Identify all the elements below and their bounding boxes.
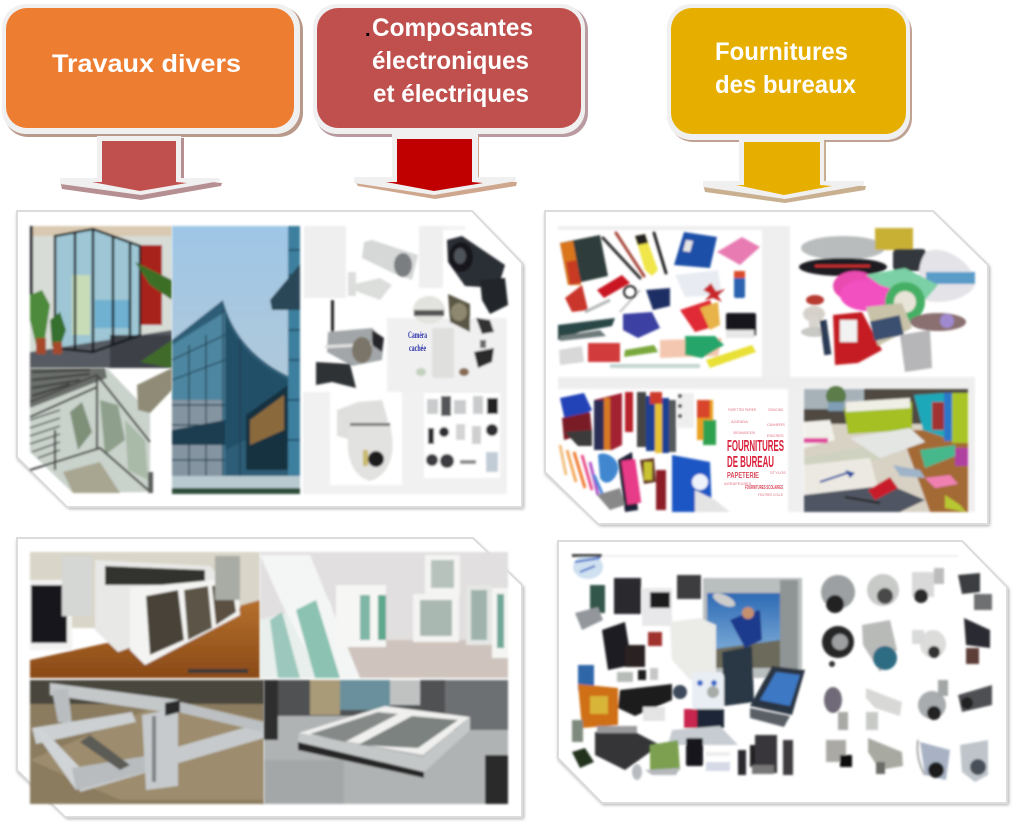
word cloud: Fournitures de bureau: ENCRES	[767, 433, 784, 438]
arrow: Composantes	[354, 134, 517, 199]
panel: electronics and surveillance	[558, 541, 1009, 805]
icon: bullet camera	[348, 240, 418, 300]
word cloud: Fournitures de bureau	[724, 407, 786, 497]
word cloud: Fournitures de bureau: PAPETERIE	[727, 471, 759, 480]
word cloud: Fournitures de bureau: CRAYONS	[768, 407, 783, 412]
word cloud: Fournitures de bureau: FOURNITURES SCOLAIRES	[745, 485, 783, 491]
icon: hidden camera group	[413, 294, 494, 378]
label: Caméra cachée: Caméra	[408, 330, 427, 340]
photo: white PVC window frames	[260, 552, 508, 678]
photo: binders and files	[560, 392, 730, 512]
photo: desk with documents	[804, 386, 968, 512]
word cloud: Fournitures de bureau: FURETTES PAPIER	[728, 407, 756, 412]
icon: black camera	[447, 236, 508, 314]
heading: Composantes électroniques et électriques: .	[365, 19, 371, 41]
cameras grid	[821, 568, 992, 782]
heading: Composantes électroniques et électriques: électroniques	[372, 47, 529, 75]
word cloud: Fournitures de bureau: CAHIERS	[767, 422, 785, 427]
photo: glass veranda	[30, 226, 172, 368]
heading: Fournitures des bureaux: Fournitures	[715, 38, 848, 66]
heading: Travaux divers: Travaux divers	[52, 50, 241, 78]
word cloud: Fournitures de bureau: ORGANISATION	[733, 430, 755, 435]
icon: silver wireless camera	[316, 300, 384, 388]
word cloud: Fournitures de bureau: DE BUREAU	[727, 454, 774, 471]
heading: Composantes électroniques et électriques: et électriques	[373, 80, 529, 108]
photo: aluminium profile frame	[30, 680, 264, 804]
header box: Fournitures des bureaux	[667, 4, 912, 142]
photo: installed skylight window	[264, 680, 508, 804]
photo: pen case, calculator, red box	[799, 228, 975, 372]
photo: glass building	[172, 226, 300, 494]
icon: dome camera	[337, 400, 393, 481]
security cameras collage	[303, 226, 508, 494]
photo: consumer electronics	[572, 575, 805, 780]
word cloud: Fournitures de bureau: AGRAFEUSES	[724, 481, 752, 486]
panel: glass works and security cameras	[17, 211, 524, 509]
panel: office supplies	[545, 211, 990, 526]
heading: Composantes électroniques et électriques: Composantes	[372, 14, 533, 42]
photo: stacked windows on wood floor	[30, 552, 260, 678]
word cloud: Fournitures de bureau: STYLOS	[770, 470, 786, 475]
photo grey backing	[558, 226, 975, 512]
header box: Travaux divers	[2, 4, 303, 137]
logo and rule	[572, 554, 958, 579]
panel: aluminium and PVC windows	[17, 538, 524, 819]
photo: glass balcony	[30, 368, 172, 493]
word cloud: Fournitures de bureau: AGENDA	[731, 419, 748, 424]
word cloud: Fournitures de bureau: FOURNITURES	[727, 438, 784, 455]
label: Caméra cachée: cachée	[409, 343, 426, 353]
word cloud: Fournitures de bureau: FEUTRES COLLE	[758, 492, 783, 497]
icon: camera product grid	[424, 393, 500, 478]
header box: Composantes électroniques et électriques	[313, 4, 588, 137]
heading: Fournitures des bureaux: des bureaux	[715, 71, 856, 99]
photo: assorted stationery	[558, 232, 760, 368]
arrow: Travaux divers	[60, 136, 222, 200]
arrow: Fournitures	[703, 140, 866, 203]
